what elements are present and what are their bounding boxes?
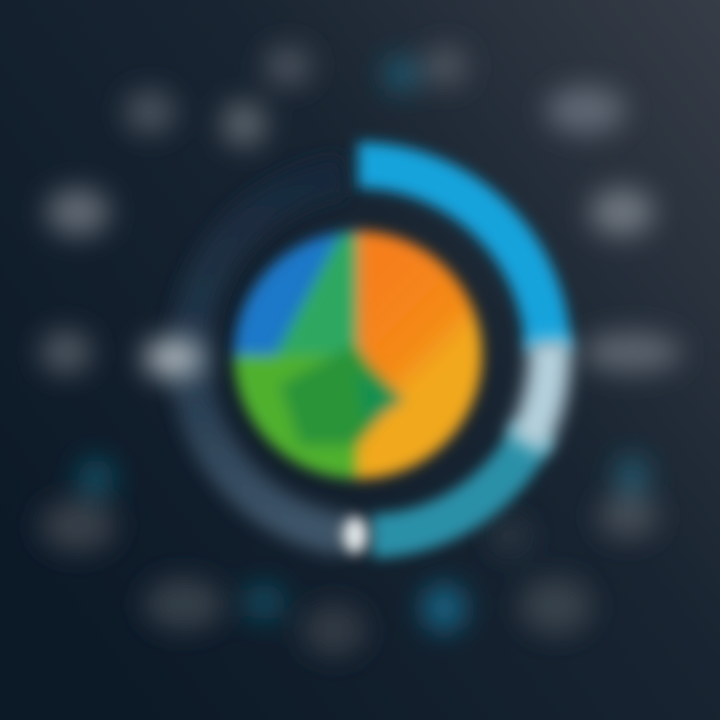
outer ring: teal arc bbox=[372, 430, 534, 536]
central pie chart bbox=[234, 231, 482, 479]
pie: blue quadrant bbox=[234, 231, 358, 355]
outer ring: white segment bbox=[526, 340, 549, 445]
pie: green tip bbox=[355, 370, 405, 425]
pie: lower green quadrant bbox=[234, 355, 358, 479]
scattered blurred labels bbox=[40, 46, 682, 656]
outer ring: white end cap bbox=[342, 516, 368, 554]
pie: upper green bbox=[275, 231, 370, 400]
pie: dark green centre bbox=[280, 345, 402, 445]
outer ring: blue arc bbox=[358, 165, 548, 350]
bright left label bbox=[144, 338, 204, 378]
pie: warm half bbox=[358, 231, 482, 479]
outer ring: dark left half bbox=[190, 175, 345, 535]
